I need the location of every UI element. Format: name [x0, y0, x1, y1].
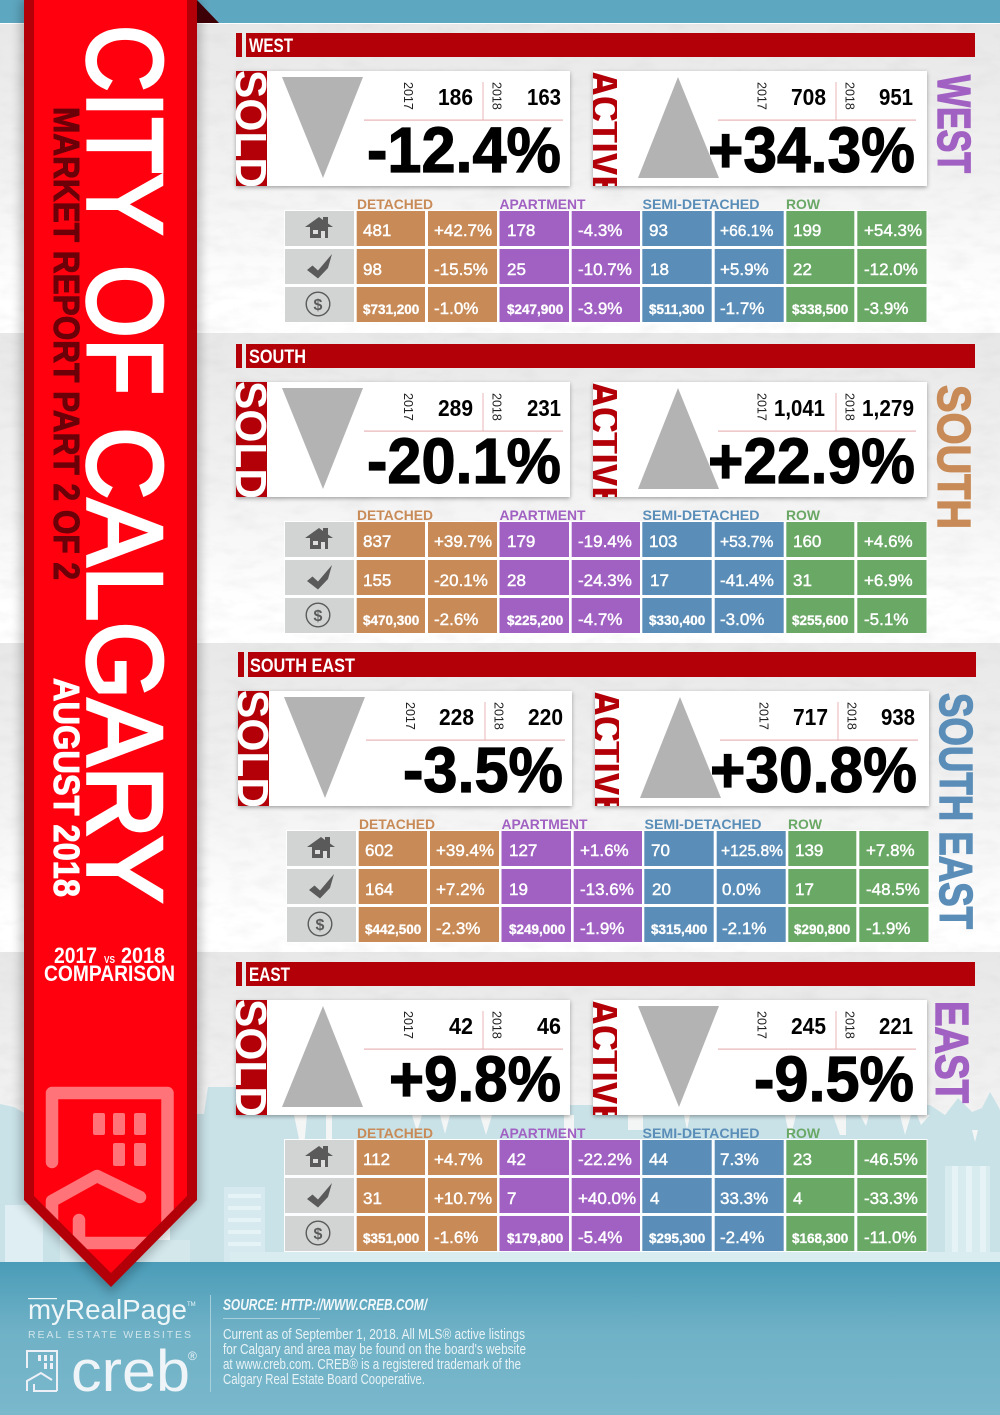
table: south east: $442,500 [365, 922, 421, 937]
table: south: $470,300 [363, 613, 419, 628]
card: sold: 2018 [492, 702, 506, 730]
table: south east: +39.4% [436, 841, 494, 860]
table: south: $225,200 [507, 613, 563, 628]
table: west: ROW [786, 196, 821, 212]
side label: south: SOUTH [928, 385, 980, 529]
card: sold [226, 70, 570, 188]
footer note: Calgary Real Estate Board Cooperative. [223, 1372, 425, 1388]
card: active: 1,041 [774, 395, 825, 421]
card: active: 2017 [756, 702, 770, 730]
table: south: +53.7% [720, 534, 773, 551]
table: east: 7 [507, 1189, 516, 1208]
heading bar: east: EAST [249, 965, 290, 986]
table: east: $351,000 [363, 1231, 419, 1246]
table: south [284, 507, 928, 634]
table: south: 155 [363, 571, 391, 590]
footer note: for Calgary and area may be found on the board's website [223, 1342, 526, 1358]
card: sold: 186 [438, 84, 473, 110]
card: sold: -12.4% [367, 114, 561, 186]
card: active: ACTIVE [580, 1000, 629, 1128]
table: south: ROW [786, 507, 821, 523]
table: east: -33.3% [864, 1189, 918, 1208]
card: sold: +9.8% [389, 1043, 561, 1115]
footer divider [210, 1295, 211, 1392]
table: west: 98 [363, 260, 382, 279]
table: west: -1.0% [434, 299, 478, 318]
table: south east: 20 [652, 880, 671, 899]
table: south east: 17 [795, 880, 814, 899]
table: west: -10.7% [578, 260, 632, 279]
table: south: SEMI-DETACHED [642, 507, 760, 523]
logo: creb: ® [188, 1349, 197, 1363]
footer note: Current as of September 1, 2018. All MLS® active listings [223, 1327, 525, 1343]
table: east: 4 [650, 1189, 659, 1208]
table: south east: SEMI-DETACHED [644, 816, 762, 832]
table: east: -5.4% [578, 1228, 622, 1247]
table: south: 103 [649, 532, 677, 551]
table: south east: 19 [509, 880, 528, 899]
table: south: 160 [793, 532, 821, 551]
footer note: at www.creb.com. CREB® is a registered trademark of the [223, 1357, 521, 1373]
table: west: -1.7% [720, 299, 764, 318]
background band: south [0, 333, 1000, 643]
card: sold: SOLD [226, 999, 275, 1117]
card: active: 717 [793, 704, 828, 730]
card: active: 2018 [842, 393, 856, 421]
table: east: 7.3% [720, 1150, 759, 1169]
ribbon shadow [20, 0, 201, 1294]
table: south east: +1.6% [580, 841, 629, 860]
card: active: 2018 [842, 82, 856, 110]
table: east: SEMI-DETACHED [642, 1125, 760, 1141]
table: east: APARTMENT [500, 1125, 586, 1141]
section: west [226, 33, 980, 323]
table: south east: -1.9% [866, 919, 910, 938]
card: active: 951 [879, 84, 913, 110]
table: east: $295,300 [649, 1231, 705, 1246]
comparison label: VS [104, 955, 115, 966]
table: east: 42 [507, 1150, 526, 1169]
table: west: +42.7% [434, 221, 492, 240]
card: active: ACTIVE [580, 382, 629, 510]
comparison label: 2017 [54, 943, 97, 968]
table: west: $338,500 [792, 302, 848, 317]
table: west: -3.9% [864, 299, 908, 318]
card: sold: 2018 [490, 393, 504, 421]
card: active: +30.8% [710, 734, 917, 806]
table: west: 93 [649, 221, 668, 240]
ribbon watermark logo [52, 1093, 168, 1243]
table: south: -5.1% [864, 610, 908, 629]
table: south: -4.7% [578, 610, 622, 629]
card: sold: 2017 [403, 702, 417, 730]
table: south east: DETACHED [359, 816, 435, 832]
card: active: +34.3% [708, 114, 915, 186]
table: east: 4 [793, 1189, 802, 1208]
table: east [284, 1125, 928, 1252]
ribbon fold [197, 0, 219, 23]
table: west: -3.9% [578, 299, 622, 318]
comparison label [44, 943, 175, 986]
side label: west: WEST [928, 75, 980, 173]
table: east: DETACHED [357, 1125, 433, 1141]
table: south east: -13.6% [580, 880, 634, 899]
table: east: -2.4% [720, 1228, 764, 1247]
table: south east: $249,000 [509, 922, 565, 937]
card: sold: 2018 [490, 82, 504, 110]
table: east: +4.7% [434, 1150, 483, 1169]
table: east: +40.0% [578, 1189, 636, 1208]
table: south east: 70 [651, 841, 670, 860]
table: south east: 602 [365, 841, 393, 860]
table: south east: APARTMENT [502, 816, 588, 832]
logo: creb [27, 1339, 197, 1404]
card: active [582, 691, 929, 819]
table: east: -22.2% [578, 1150, 632, 1169]
card: sold: SOLD [228, 690, 277, 808]
table: south: +6.9% [864, 571, 913, 590]
table: east: -1.6% [434, 1228, 478, 1247]
section: east [226, 962, 978, 1252]
table: west: -4.3% [578, 221, 622, 240]
ribbon title: city of calgary: CITY [65, 25, 185, 235]
table: east: 112 [363, 1150, 390, 1169]
card: active: 2017 [754, 1011, 768, 1039]
ribbon title: city of calgary [65, 25, 185, 903]
logo: myRealPage: REAL ESTATE WEBSITES [28, 1329, 191, 1341]
table: west: 22 [793, 260, 812, 279]
card: sold: -3.5% [403, 734, 563, 806]
ribbon title: city of calgary: OF [65, 265, 185, 395]
table: south: DETACHED [357, 507, 433, 523]
side label: east: EAST [926, 1001, 978, 1103]
card: sold: 220 [528, 704, 563, 730]
heading bar: south east [238, 652, 976, 677]
comparison label: 2018 [121, 943, 165, 968]
table: east: $179,800 [507, 1231, 563, 1246]
section: south east [228, 652, 982, 943]
card: sold: -20.1% [367, 425, 561, 497]
card: active: 1,279 [862, 395, 914, 421]
table: west: 178 [507, 221, 535, 240]
card: sold [226, 381, 570, 499]
table: east: 31 [363, 1189, 382, 1208]
card: sold: SOLD [226, 381, 275, 499]
heading bar: south east: SOUTH EAST [250, 656, 355, 677]
table: south: -24.3% [578, 571, 632, 590]
heading bar: south: SOUTH [249, 347, 306, 368]
table: east: -46.5% [864, 1150, 918, 1169]
comparison label: COMPARISON [44, 961, 175, 986]
table: east: 44 [649, 1150, 668, 1169]
card: active: 2017 [754, 393, 768, 421]
card: sold: 42 [449, 1013, 473, 1039]
source line: SOURCE: HTTP://WWW.CREB.COM/ [223, 1297, 428, 1314]
table: south: -41.4% [720, 571, 774, 590]
card: active: +22.9% [708, 425, 915, 497]
card: sold [226, 999, 570, 1117]
table: west: 481 [363, 221, 391, 240]
heading bar: west [236, 33, 975, 57]
card: active: 708 [791, 84, 826, 110]
card: active: 245 [791, 1013, 826, 1039]
table: south east: $290,800 [794, 922, 850, 937]
card: sold: 231 [527, 395, 561, 421]
ribbon title: city of calgary: CALGARY [65, 427, 185, 903]
table: south: -3.0% [720, 610, 764, 629]
table: south east [286, 816, 930, 943]
card: sold: 2018 [490, 1011, 504, 1039]
table: south: 31 [793, 571, 812, 590]
logo: myRealPage: myRealPage [28, 1294, 187, 1325]
table: south east: ROW [788, 816, 823, 832]
table: west [284, 196, 928, 323]
card: active: 2018 [844, 702, 858, 730]
background band: east [0, 952, 1000, 1262]
card: sold: SOLD [226, 70, 275, 188]
logo: myRealPage: TM [187, 1302, 196, 1308]
top blue strip [0, 0, 1000, 23]
table: east: 33.3% [720, 1189, 768, 1208]
footer panel [0, 1262, 1000, 1415]
table: west: DETACHED [357, 196, 433, 212]
table: south: 17 [650, 571, 669, 590]
table: west: $731,200 [363, 302, 419, 317]
table: south east: +7.2% [436, 880, 485, 899]
background band: south east [0, 643, 1000, 952]
table: south east: +125.8% [721, 843, 783, 860]
table: south east: 139 [795, 841, 823, 860]
card: active: 938 [881, 704, 915, 730]
table: south: -19.4% [578, 532, 632, 551]
card: sold: 2017 [401, 82, 415, 110]
table: south east: +7.8% [866, 841, 915, 860]
background band: west [0, 24, 1000, 333]
section: south [226, 344, 980, 634]
table: south: 28 [507, 571, 526, 590]
table: east: $168,300 [792, 1231, 848, 1246]
card: active [580, 382, 927, 510]
table: west: APARTMENT [500, 196, 586, 212]
card: active: 2018 [842, 1011, 856, 1039]
source rule [223, 1318, 320, 1319]
card: active: 221 [879, 1013, 913, 1039]
heading bar: west: WEST [249, 36, 293, 57]
card: sold: 228 [439, 704, 474, 730]
card: sold: 46 [537, 1013, 561, 1039]
card: active: ACTIVE [580, 71, 629, 199]
skyline illustration [0, 1087, 1000, 1262]
card: sold: 163 [527, 84, 561, 110]
table: south: $255,600 [792, 613, 848, 628]
table: south: +39.7% [434, 532, 492, 551]
table: west: -12.0% [864, 260, 918, 279]
table: west: $511,300 [649, 302, 705, 317]
table: west: +5.9% [720, 260, 769, 279]
footer note [223, 1327, 526, 1388]
table: south: $330,400 [649, 613, 705, 628]
table: south: -20.1% [434, 571, 488, 590]
logo: myRealPage [28, 1294, 196, 1341]
card: active: -9.5% [754, 1043, 914, 1115]
card: sold: 289 [438, 395, 473, 421]
table: south: 837 [363, 532, 391, 551]
logo: creb: creb [71, 1339, 190, 1404]
red ribbon [24, 0, 197, 1287]
card: active [580, 1000, 927, 1128]
table: south east: -2.3% [436, 919, 480, 938]
table: south east: -2.1% [722, 919, 766, 938]
table: south: -2.6% [434, 610, 478, 629]
table: south east: 164 [365, 880, 393, 899]
table: east: +10.7% [434, 1189, 492, 1208]
ribbon date: AUGUST 2018 [46, 678, 87, 897]
table: west: +66.1% [720, 223, 773, 240]
card: sold: 2017 [401, 1011, 415, 1039]
card: active: ACTIVE [582, 691, 631, 819]
heading bar: east [236, 962, 975, 986]
table: south east: 127 [509, 841, 537, 860]
card: active [580, 71, 927, 199]
table: west: +54.3% [864, 221, 922, 240]
table: south: +4.6% [864, 532, 913, 551]
card: sold [228, 690, 572, 808]
table: west: 199 [793, 221, 821, 240]
table: west: -15.5% [434, 260, 488, 279]
ribbon subtitle: MARKET REPORT PART 2 OF 2 [46, 107, 87, 580]
table: south east: -48.5% [866, 880, 920, 899]
table: south east: 0.0% [722, 880, 761, 899]
side label: south east: SOUTH EAST [930, 693, 982, 929]
table: west: $247,900 [507, 302, 563, 317]
table: south: 179 [507, 532, 535, 551]
table: west: SEMI-DETACHED [642, 196, 760, 212]
table: east: -11.0% [864, 1228, 917, 1247]
table: south: APARTMENT [500, 507, 586, 523]
table: east: 23 [793, 1150, 812, 1169]
heading bar: south [236, 344, 975, 368]
table: west: 18 [650, 260, 669, 279]
card: active: 2017 [754, 82, 768, 110]
table: south east: $315,400 [651, 922, 707, 937]
table: east: ROW [786, 1125, 821, 1141]
table: west: 25 [507, 260, 526, 279]
card: sold: 2017 [401, 393, 415, 421]
table: south east: -1.9% [580, 919, 624, 938]
